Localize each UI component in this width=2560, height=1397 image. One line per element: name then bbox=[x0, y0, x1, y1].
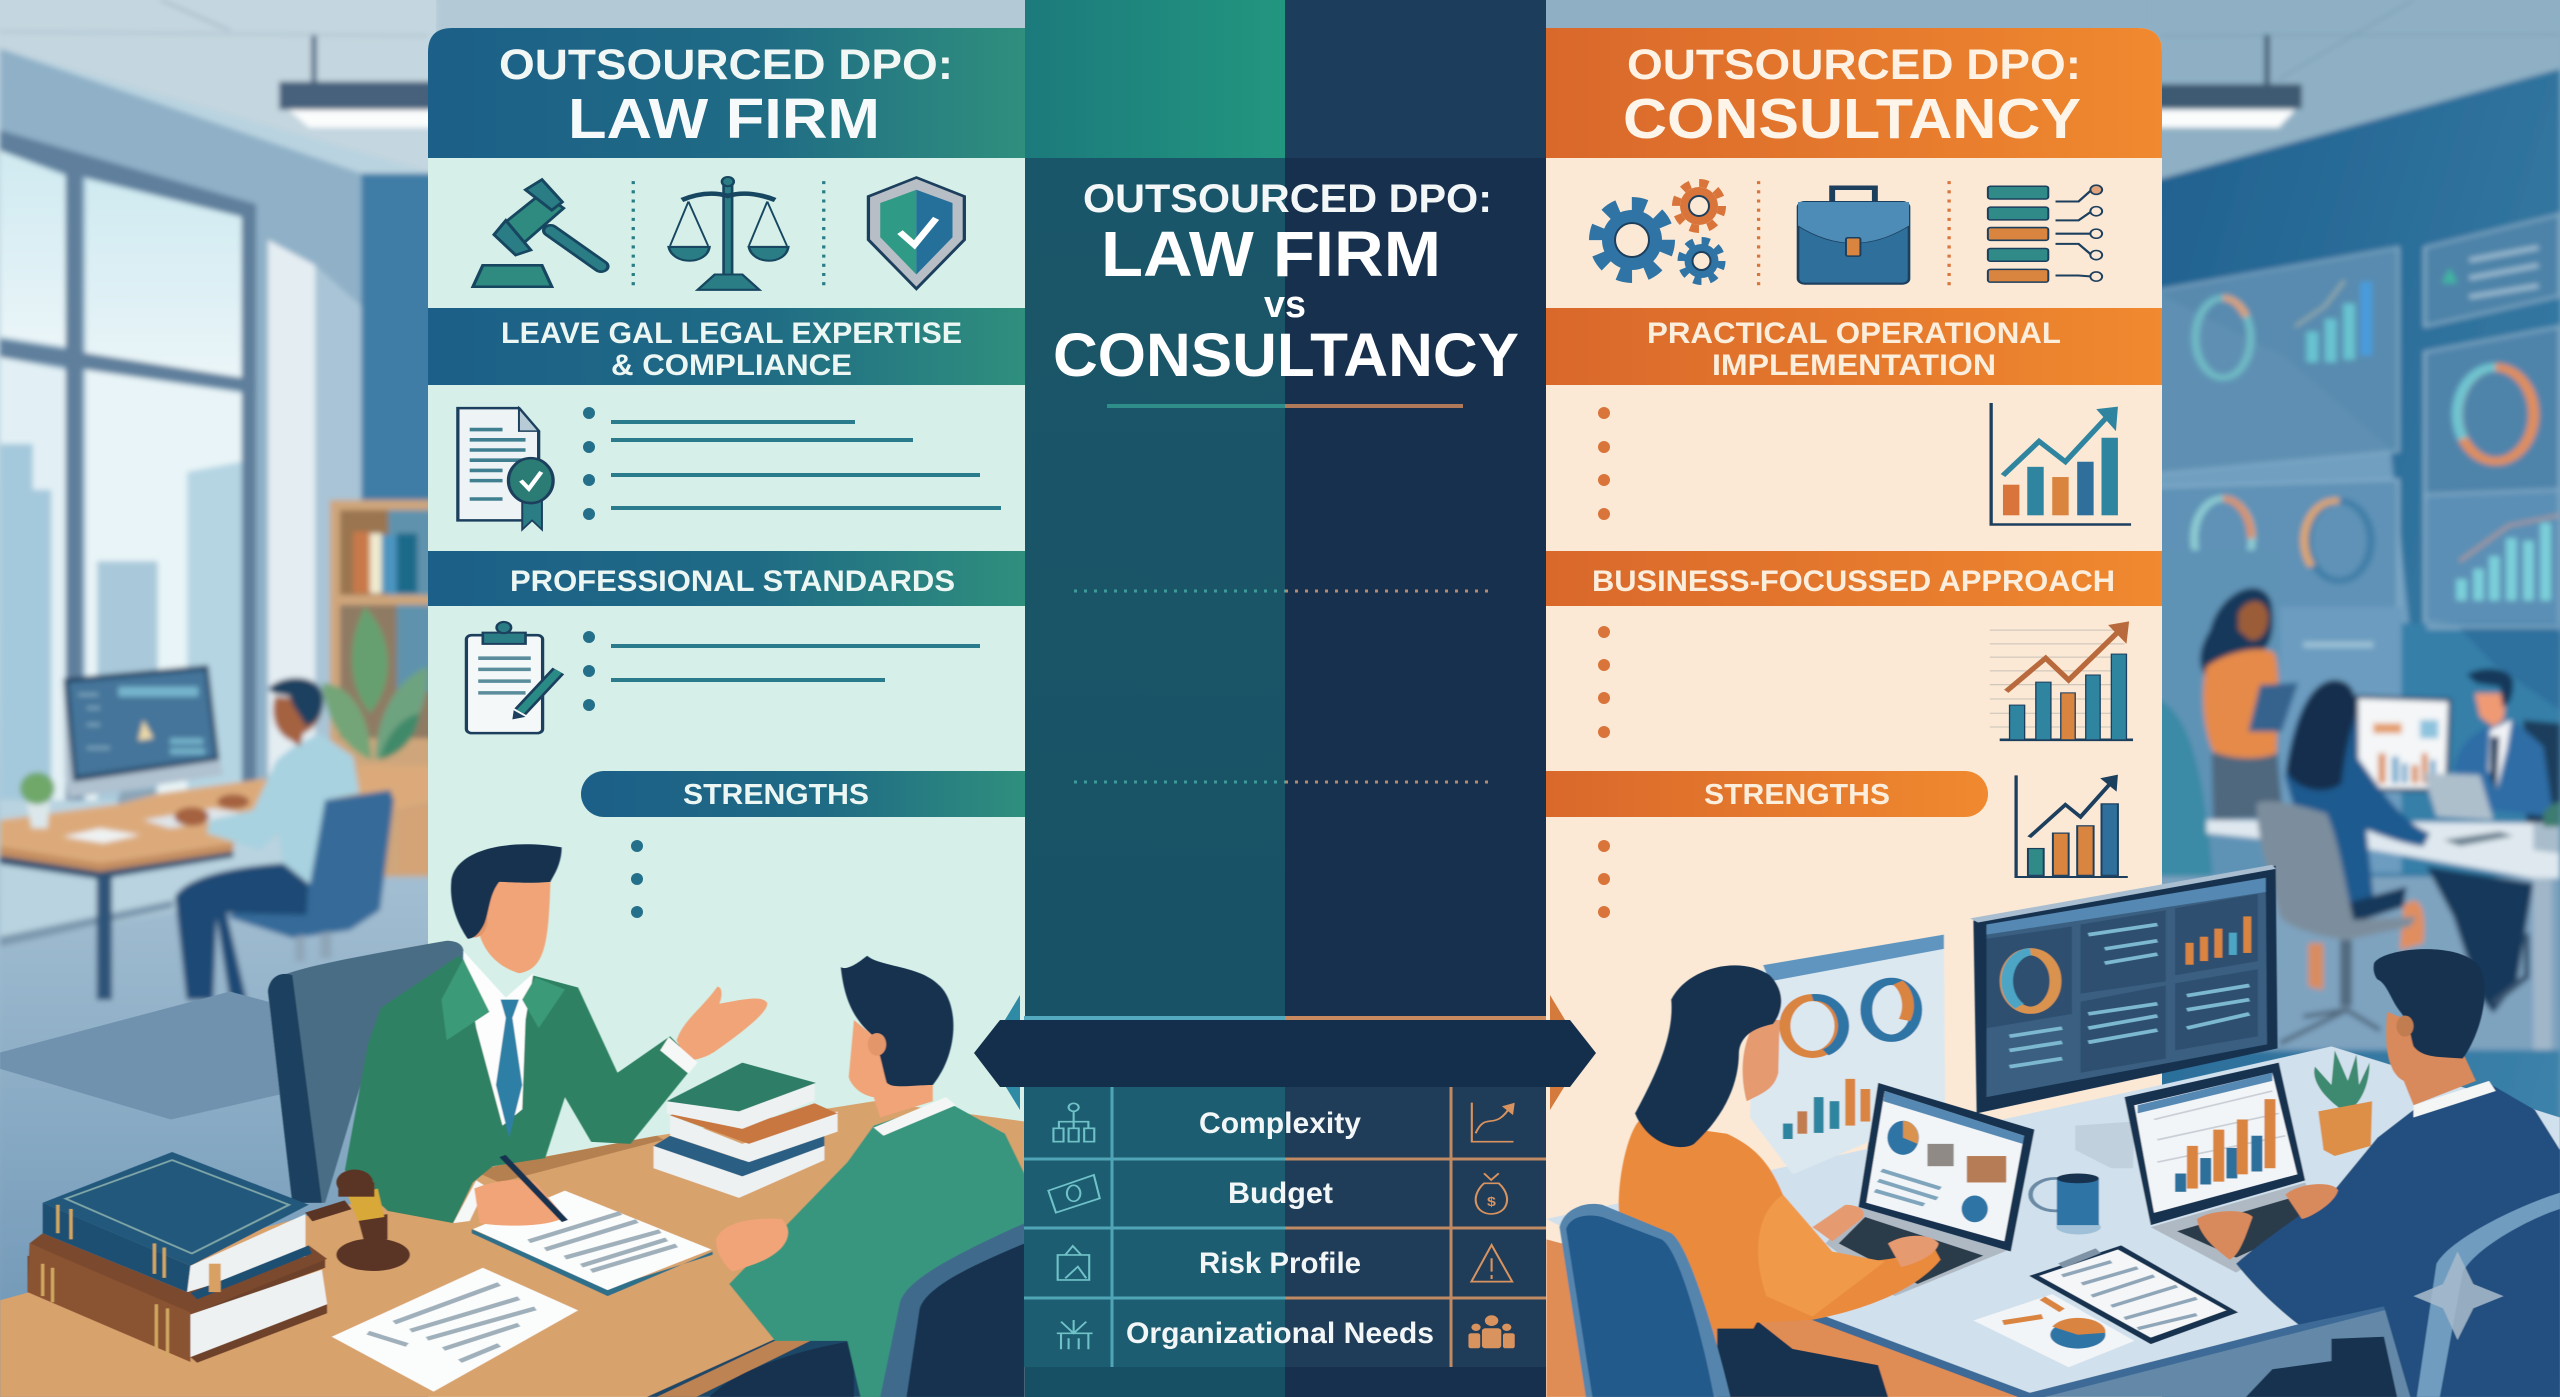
section bar: business-focussed approach: BUSINESS-FOCUSSED APPROACH bbox=[1592, 565, 2115, 598]
section bar: practical operational implementation bbox=[1546, 308, 2162, 385]
writing hand and pen bbox=[453, 1156, 565, 1226]
comparison table: Budget bbox=[1228, 1177, 1333, 1210]
left laptop bbox=[1826, 1083, 2034, 1296]
main title: vs bbox=[1264, 284, 1306, 326]
foreground chair: woman bbox=[1560, 1204, 1730, 1397]
bullet list: legal expertise bbox=[583, 407, 1001, 520]
main title bbox=[1053, 177, 1519, 389]
wall screen: large donut bbox=[2425, 327, 2560, 503]
section bar: legal expertise and compliance: & COMPLIANCE bbox=[611, 349, 852, 382]
icon row: gavel, scales, shield bbox=[473, 177, 964, 290]
dotted dividers bbox=[1074, 591, 1494, 782]
strengths pill: consultancy: STRENGTHS bbox=[1704, 779, 1890, 811]
background: left office bbox=[0, 0, 436, 1397]
law books stack bbox=[28, 1152, 327, 1363]
icon: server network bbox=[1988, 185, 2102, 282]
icon: gavel bbox=[473, 180, 601, 287]
icon: gears bbox=[1596, 183, 1722, 281]
header: consultancy: CONSULTANCY bbox=[1623, 87, 2081, 151]
background team scene bbox=[2153, 550, 2560, 1050]
wall screen: donut and bars bbox=[2154, 247, 2398, 474]
side dashboard screen bbox=[1750, 935, 1945, 1174]
header: law firm: OUTSOURCED DPO: bbox=[499, 41, 953, 89]
icon: shield with check bbox=[868, 178, 964, 289]
chair seat: man bbox=[2440, 1209, 2560, 1397]
section bar: professional standards: PROFESSIONAL STANDARDS bbox=[510, 565, 955, 598]
lawyer chair bbox=[268, 941, 464, 1203]
chair seat: woman bbox=[1566, 1215, 1714, 1397]
workstation table bbox=[1546, 1046, 2560, 1397]
table icons: law firm side bbox=[1048, 1103, 1100, 1349]
double-headed arrow banner bbox=[974, 1016, 1596, 1087]
icon: people bbox=[1468, 1315, 1515, 1348]
floor: left office bbox=[0, 860, 436, 1397]
icon: money bag bbox=[1476, 1173, 1507, 1214]
comparison table bbox=[1024, 1087, 1546, 1367]
main monitor bbox=[1970, 865, 2278, 1168]
paper with pie chart bbox=[1973, 1294, 2134, 1367]
background: right office bbox=[2153, 0, 2560, 1397]
foreground chair: man bbox=[2417, 1193, 2560, 1397]
client bbox=[709, 956, 1025, 1397]
book stack: right of desk bbox=[654, 1063, 838, 1198]
strengths pill: law firm: STRENGTHS bbox=[683, 779, 869, 811]
comparison table: Organizational Needs bbox=[1126, 1317, 1434, 1350]
icon: risk bag bbox=[1058, 1246, 1089, 1280]
panel: consultancy bbox=[1546, 28, 2162, 1397]
bullet list: professional standards bbox=[583, 631, 980, 711]
icon: sparkle watermark bbox=[2414, 1252, 2504, 1340]
bullet list: law firm strengths bbox=[631, 840, 643, 918]
floor rug bbox=[0, 992, 428, 1119]
desk bbox=[0, 1101, 1025, 1397]
main title: CONSULTANCY bbox=[1053, 321, 1519, 389]
icon: briefcase bbox=[1798, 188, 1909, 284]
ceiling strip behind panels bbox=[420, 0, 2170, 40]
chart: strengths growth bbox=[2016, 775, 2128, 877]
center column bbox=[974, 0, 1596, 1397]
panel: law firm bbox=[428, 28, 1025, 1397]
back desk worker bbox=[0, 500, 433, 1000]
documents on desk bbox=[332, 1191, 713, 1392]
center body block bbox=[1025, 158, 1546, 1397]
lawyer bbox=[345, 844, 767, 1223]
coffee mug bbox=[2031, 1174, 2101, 1234]
panel background: consultancy bbox=[1546, 28, 2162, 1397]
comparison table: Risk Profile bbox=[1199, 1247, 1361, 1280]
right laptop bbox=[2124, 1063, 2322, 1273]
header: consultancy bbox=[1546, 28, 2162, 158]
header: law firm bbox=[428, 28, 1025, 158]
section bar: practical operational implementation: PRACTICAL OPERATIONAL bbox=[1647, 317, 2061, 350]
foreground scene: lawyer and client bbox=[0, 844, 1025, 1397]
arrow side wings bbox=[985, 995, 1585, 1110]
header: consultancy: OUTSOURCED DPO: bbox=[1627, 41, 2081, 89]
section bar: legal expertise and compliance bbox=[428, 308, 1025, 385]
woman analyst bbox=[1619, 965, 1941, 1397]
clipboard report bbox=[2029, 1245, 2238, 1344]
icon: scales of justice bbox=[669, 177, 788, 290]
bullet dots: business approach bbox=[1598, 626, 1610, 738]
icon: clipboard and pen bbox=[466, 622, 558, 733]
icon row: briefcase, servers bbox=[1759, 181, 2102, 288]
foreground scene: analysts at workstation bbox=[1546, 865, 2560, 1397]
main title: LAW FIRM bbox=[1101, 218, 1441, 290]
icon: trend chart bbox=[1472, 1103, 1513, 1142]
icon: money bag: $ bbox=[1487, 1195, 1496, 1209]
background underlay: left office bbox=[0, 0, 436, 1397]
icon: hierarchy bbox=[1053, 1103, 1094, 1142]
icon: team network bbox=[1057, 1320, 1093, 1349]
icon: banknote bbox=[1048, 1175, 1100, 1213]
icon: certified document bbox=[458, 408, 553, 530]
background underlay: right office bbox=[2154, 0, 2560, 1397]
icon: warning triangle bbox=[1471, 1245, 1512, 1282]
orange wall strip bbox=[1546, 1239, 2029, 1397]
gavel on desk bbox=[309, 1169, 410, 1271]
section bar: practical operational implementation: IMPLEMENTATION bbox=[1712, 349, 1996, 382]
chart: business growth bbox=[1990, 621, 2133, 740]
section bar: business-focussed approach bbox=[1546, 551, 2162, 606]
bullet dots: implementation bbox=[1598, 407, 1610, 520]
wall screen: lower donuts bbox=[2154, 480, 2398, 633]
chart: implementation growth bbox=[1991, 403, 2131, 524]
section bar: professional standards bbox=[428, 551, 1025, 606]
strengths pill: consultancy bbox=[1546, 771, 1988, 817]
header: law firm: LAW FIRM bbox=[568, 87, 880, 151]
potted plant bbox=[2314, 1050, 2372, 1156]
title underline bbox=[1107, 404, 1463, 408]
comparison table: Complexity bbox=[1199, 1107, 1361, 1140]
section bar: legal expertise and compliance: LEAVE GAL LEGAL EXPERTISE bbox=[501, 317, 962, 350]
wall screen: small list bbox=[2425, 214, 2560, 327]
strengths pill: law firm bbox=[581, 771, 1025, 817]
man analyst bbox=[2197, 949, 2560, 1397]
bullet dots: consultancy strengths bbox=[1598, 840, 1610, 918]
wall screen: lower bars bbox=[2425, 490, 2560, 630]
main title: OUTSOURCED DPO: bbox=[1083, 177, 1492, 221]
center top block bbox=[1025, 0, 1546, 158]
floor under table bbox=[2029, 1239, 2560, 1397]
table icons: consultancy side bbox=[1468, 1103, 1515, 1348]
panel background: law firm bbox=[428, 28, 1025, 1397]
